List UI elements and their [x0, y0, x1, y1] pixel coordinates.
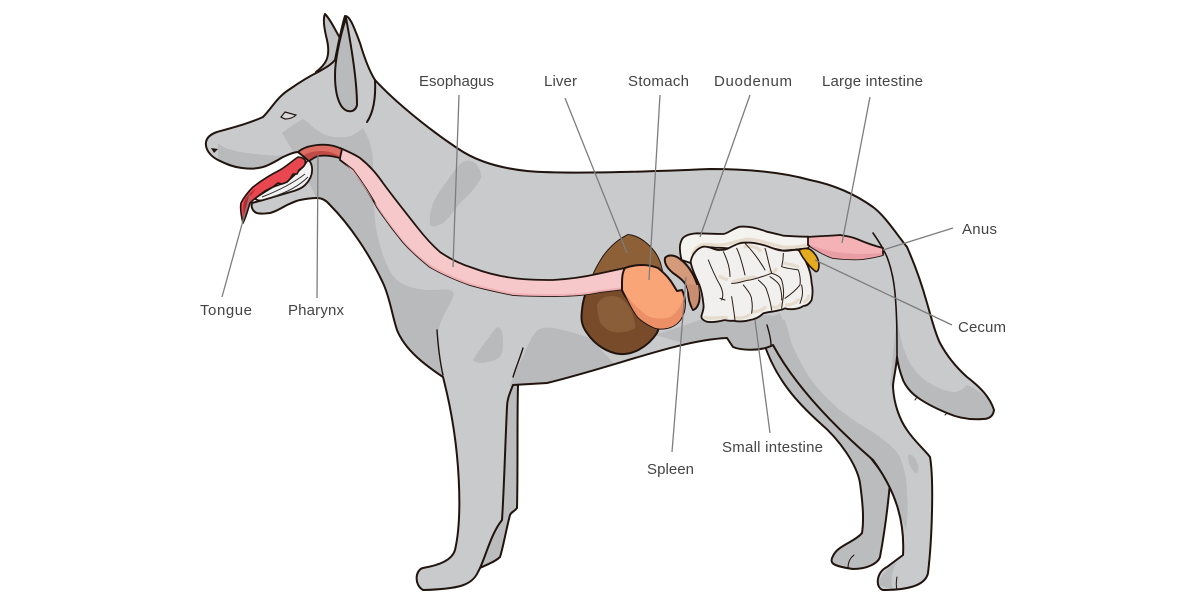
nostril — [211, 148, 218, 153]
dog digestive system diagram — [200, 13, 1005, 591]
leader lines — [222, 95, 953, 452]
labels — [200, 73, 1006, 478]
duodenum and colon band — [680, 227, 808, 263]
esophagus — [340, 148, 625, 296]
small intestine — [691, 243, 813, 322]
label: spleen: Spleen — [647, 461, 694, 478]
spleen — [665, 255, 700, 310]
label: esophagus: Esophagus — [419, 73, 494, 90]
far front leg — [470, 380, 518, 568]
label: stomach: Stomach — [628, 73, 689, 90]
large intestine — [808, 235, 883, 259]
dog body — [206, 16, 996, 590]
tongue — [241, 157, 305, 223]
label: small intestine: Small intestine — [722, 439, 823, 456]
liver — [580, 234, 664, 356]
far ear — [316, 14, 345, 76]
label: pharynx: Pharynx — [288, 302, 344, 319]
pharynx — [298, 145, 342, 161]
stomach — [622, 265, 685, 329]
label: cecum: Cecum — [958, 319, 1006, 336]
label: tongue: Tongue — [200, 302, 252, 319]
eye — [281, 112, 296, 119]
label: liver: Liver — [544, 73, 577, 90]
body outline — [206, 16, 994, 590]
label: anus: Anus — [962, 221, 997, 238]
mouth interior — [255, 160, 312, 200]
label: duodenum: Duodenum — [714, 73, 792, 90]
body shading — [218, 119, 996, 590]
label: large intestine: Large intestine — [822, 73, 923, 90]
far hind leg — [763, 340, 890, 569]
intestine fold shading — [705, 246, 809, 318]
intestines — [680, 227, 813, 322]
cecum — [799, 248, 819, 272]
intestine fold lines — [708, 243, 802, 320]
near ear inner — [335, 18, 375, 122]
